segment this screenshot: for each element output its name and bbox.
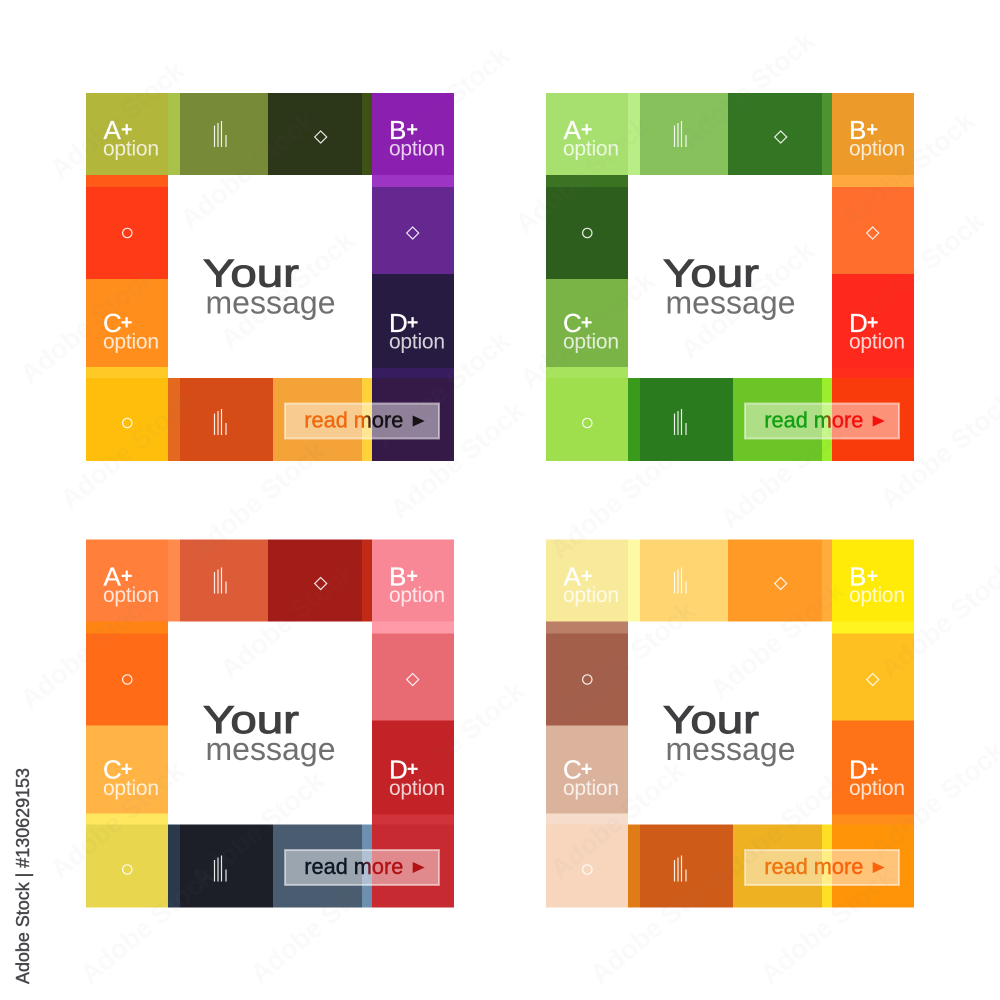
tile: top bars icon bbox=[640, 540, 728, 622]
tile: B+ option: option bbox=[389, 138, 445, 160]
watermark: repeated Adobe Stock: Adobe Stock bbox=[385, 395, 531, 525]
tile: top bars icon bbox=[640, 93, 728, 175]
tile: bottom left circle icon bbox=[86, 814, 168, 908]
watermark: repeated Adobe Stock: Adobe Stock bbox=[370, 40, 516, 170]
tile: bottom bars icon bbox=[168, 824, 273, 908]
watermark: repeated Adobe Stock: Adobe Stock bbox=[845, 205, 991, 335]
watermark: repeated Adobe Stock: Adobe Stock bbox=[715, 405, 861, 535]
tile: bottom light bbox=[733, 824, 832, 908]
tile: A+ option: A bbox=[104, 562, 121, 592]
tile: A+ option: + bbox=[121, 566, 133, 588]
button: read more bbox=[745, 404, 899, 438]
watermark: repeated Adobe Stock: Adobe Stock bbox=[185, 765, 331, 895]
tile: D+ option: + bbox=[867, 758, 878, 780]
tile: bottom right corner bbox=[832, 814, 914, 908]
watermark: repeated Adobe Stock: Adobe Stock bbox=[385, 675, 531, 805]
watermark: repeated Adobe Stock: Adobe Stock bbox=[185, 435, 331, 565]
tile: C+ option: + bbox=[121, 758, 132, 780]
tile: C+ option: option bbox=[103, 777, 159, 800]
heading: Your message bbox=[203, 699, 336, 767]
watermark: repeated Adobe Stock: Adobe Stock bbox=[15, 260, 161, 390]
tile: left circle icon bbox=[86, 175, 168, 279]
tile: C+ option: option bbox=[563, 777, 619, 800]
tile: A+ option: + bbox=[581, 566, 593, 588]
tile: D+ option: + bbox=[407, 758, 418, 780]
tile: bottom right corner bbox=[372, 368, 454, 461]
tile: B+ option: + bbox=[866, 119, 878, 141]
watermark: repeated Adobe Stock: Adobe Stock bbox=[245, 860, 391, 990]
tile: A+ option: option bbox=[103, 584, 159, 607]
tile: A+ option bbox=[86, 93, 180, 175]
tile: B+ option: B bbox=[849, 562, 866, 592]
heading: Your message: message bbox=[206, 731, 336, 767]
tile: D+ option: D bbox=[849, 754, 868, 784]
tile: C+ option: option bbox=[103, 330, 159, 354]
heading: Your message: message bbox=[666, 731, 796, 767]
tile: D+ option bbox=[832, 720, 914, 814]
tile: D+ option bbox=[372, 720, 454, 814]
tile: B+ option bbox=[832, 540, 914, 622]
tile: A+ option bbox=[546, 540, 640, 622]
tile: left circle icon bbox=[86, 622, 168, 726]
watermark: repeated Adobe Stock: Adobe Stock bbox=[215, 225, 361, 355]
tile: top bars icon bbox=[180, 93, 268, 175]
tile: D+ option bbox=[832, 274, 914, 368]
watermark: repeated Adobe Stock: Adobe Stock bbox=[515, 265, 661, 395]
tile: A+ option: + bbox=[121, 119, 133, 141]
tile: left circle icon bbox=[546, 175, 628, 279]
watermark: repeated Adobe Stock: Adobe Stock bbox=[545, 435, 691, 565]
button: read more bbox=[745, 850, 899, 885]
tile: top diamond icon bbox=[728, 93, 832, 175]
tile: D+ option: option bbox=[849, 330, 905, 354]
tile: bottom bars icon bbox=[168, 378, 273, 461]
panel: red and slate frame bbox=[86, 540, 454, 908]
heading: Your message: Your bbox=[663, 699, 759, 742]
tile: A+ option: A bbox=[564, 562, 581, 592]
heading: Your message: Your bbox=[663, 253, 759, 296]
watermark: repeated Adobe Stock: Adobe Stock bbox=[75, 860, 221, 990]
tile: B+ option: option bbox=[849, 138, 905, 160]
tile: D+ option: D bbox=[849, 308, 868, 338]
tile: C+ option bbox=[546, 726, 628, 814]
tile: bottom left circle icon bbox=[86, 367, 168, 461]
tile: B+ option: B bbox=[389, 562, 406, 592]
tile: top diamond icon bbox=[268, 93, 372, 175]
tile: B+ option bbox=[372, 93, 454, 175]
tile: right diamond icon bbox=[832, 622, 914, 720]
tile: D+ option: D bbox=[389, 308, 408, 338]
tile: A+ option bbox=[546, 93, 640, 175]
heading: Your message: Your bbox=[203, 699, 299, 742]
tile: bottom left circle icon bbox=[546, 367, 628, 461]
watermark: repeated Adobe Stock: Adobe Stock bbox=[510, 110, 656, 240]
panel: yellow and orange frame bbox=[546, 540, 914, 908]
tile: right diamond icon bbox=[372, 622, 454, 720]
tile: A+ option: option bbox=[563, 584, 619, 607]
tile: B+ option bbox=[372, 540, 454, 622]
tile: bottom bars icon bbox=[628, 824, 733, 908]
tile: left circle icon bbox=[546, 622, 628, 726]
tile: C+ option: C bbox=[563, 754, 582, 784]
watermark: repeated Adobe Stock: Adobe Stock bbox=[705, 575, 851, 705]
tile: bottom bars icon bbox=[628, 378, 733, 461]
heading: Your message bbox=[203, 253, 336, 320]
watermark: repeated Adobe Stock: Adobe Stock bbox=[675, 25, 821, 155]
tile: C+ option: C bbox=[103, 754, 122, 784]
watermark: repeated Adobe Stock: Adobe Stock bbox=[555, 595, 701, 725]
tile: D+ option: option bbox=[389, 777, 445, 800]
tile: B+ option: + bbox=[406, 119, 418, 141]
tile: B+ option: + bbox=[866, 566, 878, 588]
tile: D+ option: option bbox=[389, 330, 445, 354]
button: read more: read more bbox=[304, 854, 403, 879]
tile: A+ option: option bbox=[563, 138, 619, 160]
tile: C+ option: + bbox=[581, 312, 592, 334]
tile: top diamond icon bbox=[728, 540, 832, 622]
tile: D+ option: option bbox=[849, 777, 905, 800]
watermark: repeated Adobe Stock: Adobe Stock bbox=[705, 765, 851, 895]
tile: D+ option: + bbox=[407, 312, 418, 334]
tile: right diamond icon bbox=[832, 175, 914, 274]
tile: C+ option: option bbox=[563, 330, 619, 354]
tile: top bars icon bbox=[180, 540, 268, 622]
tile: C+ option bbox=[86, 726, 168, 814]
tile: B+ option: + bbox=[406, 566, 418, 588]
watermark: repeated Adobe Stock: Adobe Stock bbox=[55, 385, 201, 515]
tile: A+ option: A bbox=[564, 115, 581, 145]
watermark: repeated Adobe Stock: Adobe Stock bbox=[585, 860, 731, 990]
tile: D+ option: + bbox=[867, 312, 878, 334]
panel: green and red frame bbox=[546, 93, 914, 461]
tile: B+ option: B bbox=[849, 115, 866, 145]
heading: Your message: Your bbox=[203, 253, 299, 296]
heading: Your message: message bbox=[666, 284, 796, 320]
tile: A+ option bbox=[86, 540, 180, 622]
watermark: repeated Adobe Stock: Adobe Stock bbox=[15, 585, 161, 715]
tile: A+ option: + bbox=[581, 119, 593, 141]
heading: Your message bbox=[663, 253, 796, 320]
heading: Your message: message bbox=[206, 284, 336, 320]
tile: C+ option: C bbox=[563, 308, 582, 338]
tile: A+ option: option bbox=[103, 138, 159, 160]
tile: bottom light bbox=[733, 378, 832, 461]
tile: C+ option: + bbox=[581, 758, 592, 780]
watermark: repeated Adobe Stock: Adobe Stock bbox=[755, 860, 901, 990]
tile: B+ option bbox=[832, 93, 914, 175]
tile: C+ option: C bbox=[103, 308, 122, 338]
tile: B+ option: B bbox=[389, 115, 406, 145]
tile: bottom light bbox=[273, 824, 372, 908]
watermark: repeated Adobe Stock: Adobe Stock bbox=[545, 755, 691, 885]
panel: purple and orange frame bbox=[86, 93, 454, 461]
tile: C+ option: + bbox=[121, 312, 132, 334]
watermark: repeated Adobe Stock: Adobe Stock bbox=[215, 555, 361, 685]
watermark: repeated Adobe Stock: Adobe Stock bbox=[370, 325, 516, 455]
watermark: repeated Adobe Stock: Adobe Stock bbox=[45, 55, 191, 185]
tile: A+ option: A bbox=[104, 115, 121, 145]
button: read more bbox=[285, 850, 439, 885]
tile: bottom right corner bbox=[372, 814, 454, 908]
button: read more: read more bbox=[764, 407, 863, 432]
tile: D+ option: D bbox=[389, 754, 408, 784]
credit: Adobe Stock number: Adobe Stock | #130629153 bbox=[13, 768, 33, 984]
tile: bottom left circle icon bbox=[546, 814, 628, 908]
tile: bottom right corner bbox=[832, 368, 914, 461]
watermark: repeated Adobe Stock: Adobe Stock bbox=[175, 105, 321, 235]
watermark: repeated Adobe Stock: Adobe Stock bbox=[835, 105, 981, 235]
tile: D+ option bbox=[372, 274, 454, 368]
button: read more bbox=[285, 404, 439, 438]
tile: right diamond icon bbox=[372, 175, 454, 274]
tile: C+ option bbox=[546, 279, 628, 367]
watermark: repeated Adobe Stock: Adobe Stock bbox=[45, 755, 191, 885]
tile: C+ option bbox=[86, 279, 168, 367]
tile: bottom light bbox=[273, 378, 372, 461]
watermark: repeated Adobe Stock: Adobe Stock bbox=[675, 235, 821, 365]
tile: B+ option: option bbox=[849, 584, 905, 607]
heading: Your message bbox=[663, 699, 796, 767]
button: read more: read more bbox=[764, 854, 863, 879]
tile: top diamond icon bbox=[268, 540, 372, 622]
tile: B+ option: option bbox=[389, 584, 445, 607]
button: read more: read more bbox=[304, 407, 403, 432]
